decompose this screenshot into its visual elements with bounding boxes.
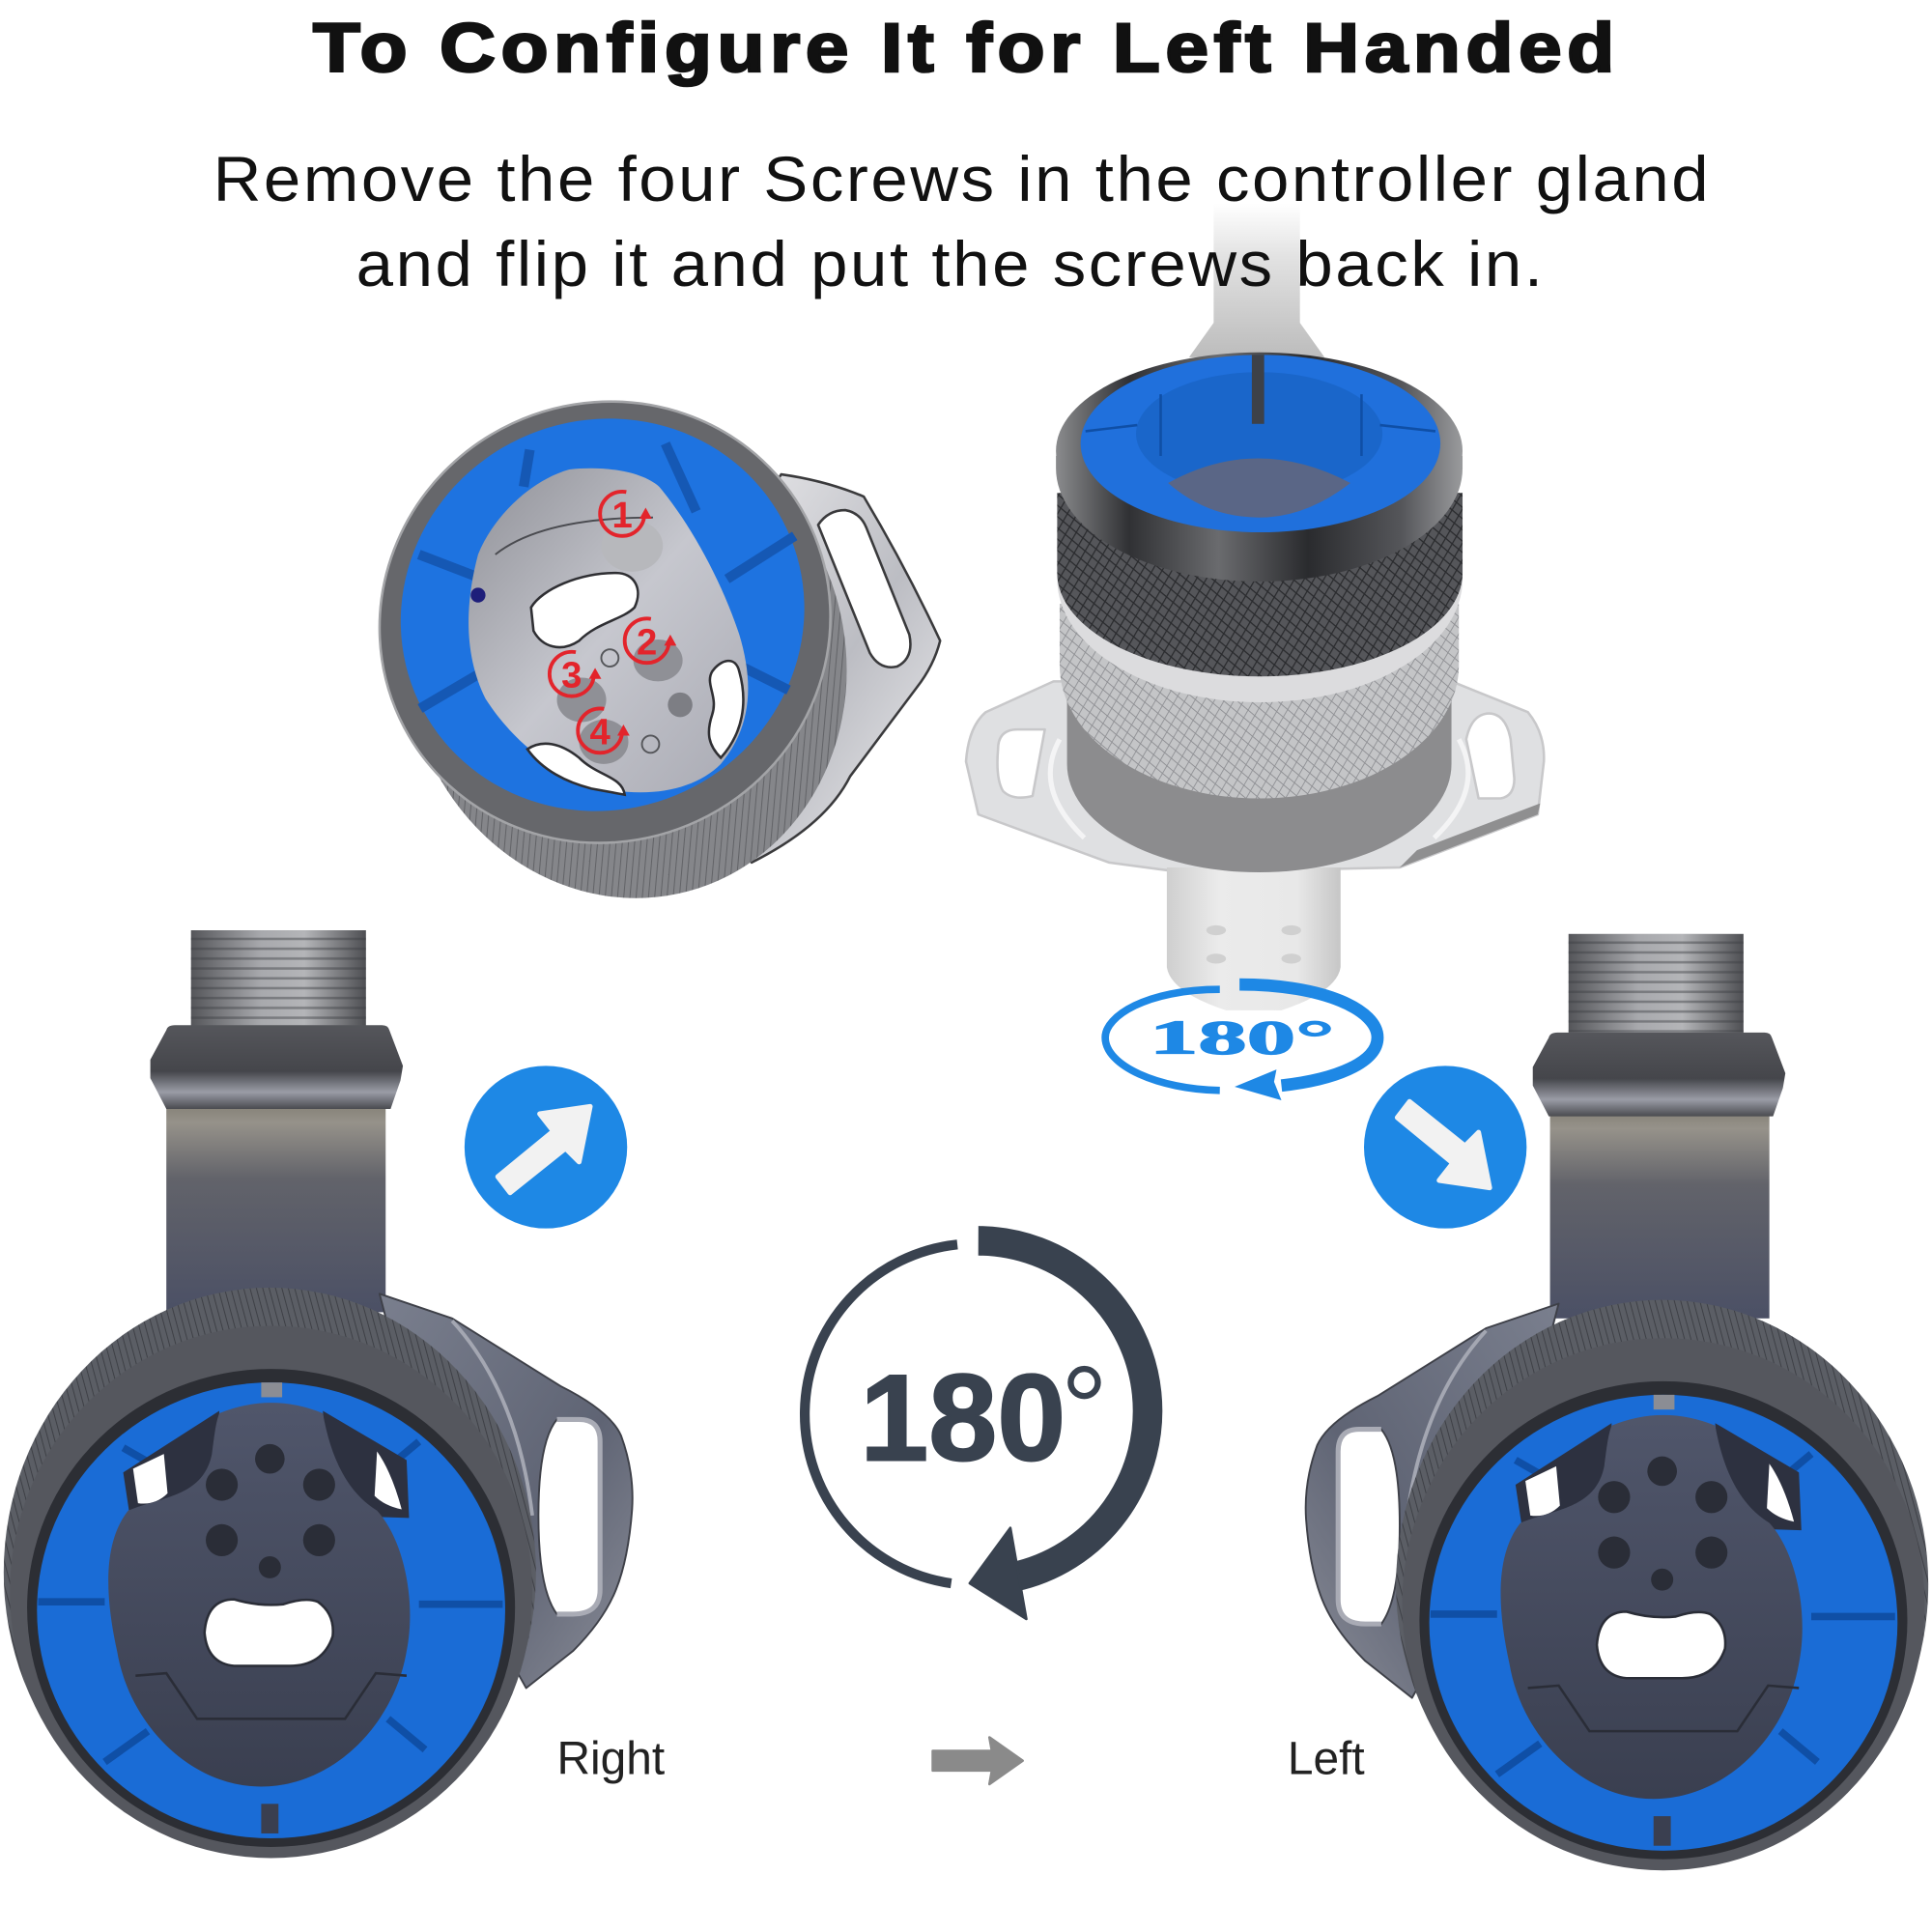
flange — [380, 1293, 633, 1688]
flange — [1306, 1303, 1559, 1698]
top-center device: controller gland, side view — [966, 203, 1544, 1010]
thread — [1569, 934, 1744, 1033]
gland ring and plate — [1396, 1300, 1928, 1870]
body bands — [1067, 616, 1452, 872]
instruction text: Remove the four Screws in the controller gland — [213, 144, 1709, 215]
top-left device: gland interior with numbered screws — [307, 327, 940, 948]
mounting flange — [966, 681, 1544, 872]
screw 1: 1 — [611, 495, 633, 536]
gray direction arrow — [933, 1737, 1023, 1784]
screw 4: 4 — [590, 711, 611, 753]
screw holes — [206, 1444, 335, 1578]
lower tube — [1167, 867, 1341, 1010]
neck — [1550, 1103, 1770, 1319]
white cut-outs — [527, 573, 743, 795]
blue sleeve — [336, 353, 869, 877]
neck — [166, 1096, 385, 1312]
label: Right: Right — [557, 1734, 665, 1785]
screw 2: 2 — [637, 621, 657, 663]
180 degree blue rotation mark: 180° — [1150, 1011, 1334, 1065]
screw 1 — [600, 492, 663, 572]
nut — [151, 1025, 403, 1109]
small details — [470, 518, 693, 753]
blue arrow button down-right — [1364, 1065, 1526, 1229]
blue sleeve — [37, 1382, 505, 1838]
thread — [191, 930, 366, 1029]
instruction text: and flip it and put the screws back in. — [356, 229, 1543, 300]
title: To Configure It for Left Handed — [313, 10, 1614, 87]
blue arrow button up-right — [465, 1065, 627, 1229]
inner plate — [108, 1403, 410, 1786]
lower plate relief — [135, 1673, 407, 1719]
central opening — [205, 1600, 333, 1665]
instruction text — [213, 144, 1709, 300]
label: Left: Left — [1288, 1734, 1365, 1785]
screw 3 — [550, 652, 607, 722]
screw 3: 3 — [561, 655, 582, 696]
right device: left-hand configuration — [1306, 934, 1928, 1870]
screw 2 — [625, 618, 683, 681]
knurled body — [352, 370, 900, 948]
180 degree blue rotation mark — [1105, 984, 1378, 1100]
left device: right-hand configuration — [4, 930, 633, 1858]
outer ring — [4, 1288, 536, 1857]
see-through openings — [124, 1410, 409, 1518]
pipe — [1189, 203, 1324, 357]
blue sleeve top — [1056, 353, 1463, 550]
large 180 degree icon — [805, 1240, 1148, 1619]
large 180 degree icon: 180 — [860, 1350, 1065, 1487]
nut — [1533, 1033, 1785, 1117]
screw 4 — [578, 708, 630, 764]
inner plate — [469, 469, 748, 792]
flange — [690, 474, 940, 863]
outer ring — [307, 327, 903, 917]
